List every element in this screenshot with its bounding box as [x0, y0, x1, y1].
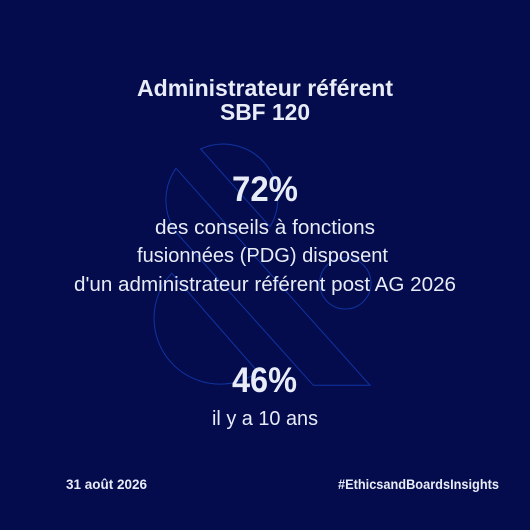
footer hashtag: #EthicsandBoardsInsights	[338, 477, 499, 492]
description of 72% statistic: des conseils à fonctions	[155, 217, 375, 239]
logo: top disc segment	[201, 144, 278, 227]
statistic: 46%: 46%	[232, 361, 297, 400]
description of 46% statistic: il y a 10 ans	[212, 408, 318, 430]
title	[137, 75, 393, 125]
title: Administrateur référent	[137, 75, 393, 101]
logo: central diagonal band	[166, 168, 370, 385]
logo: small circle	[320, 258, 371, 309]
footer date: 31 août 2026	[66, 477, 147, 492]
description of 72% statistic	[74, 217, 456, 296]
title: SBF 120	[220, 99, 310, 125]
background decorative logo outline	[154, 144, 371, 385]
description of 72% statistic: d'un administrateur référent post AG 2026	[74, 274, 456, 296]
description of 72% statistic: fusionnées (PDG) disposent	[137, 245, 388, 267]
logo: bottom disc segment	[154, 273, 258, 384]
statistic: 72%: 72%	[232, 170, 298, 209]
